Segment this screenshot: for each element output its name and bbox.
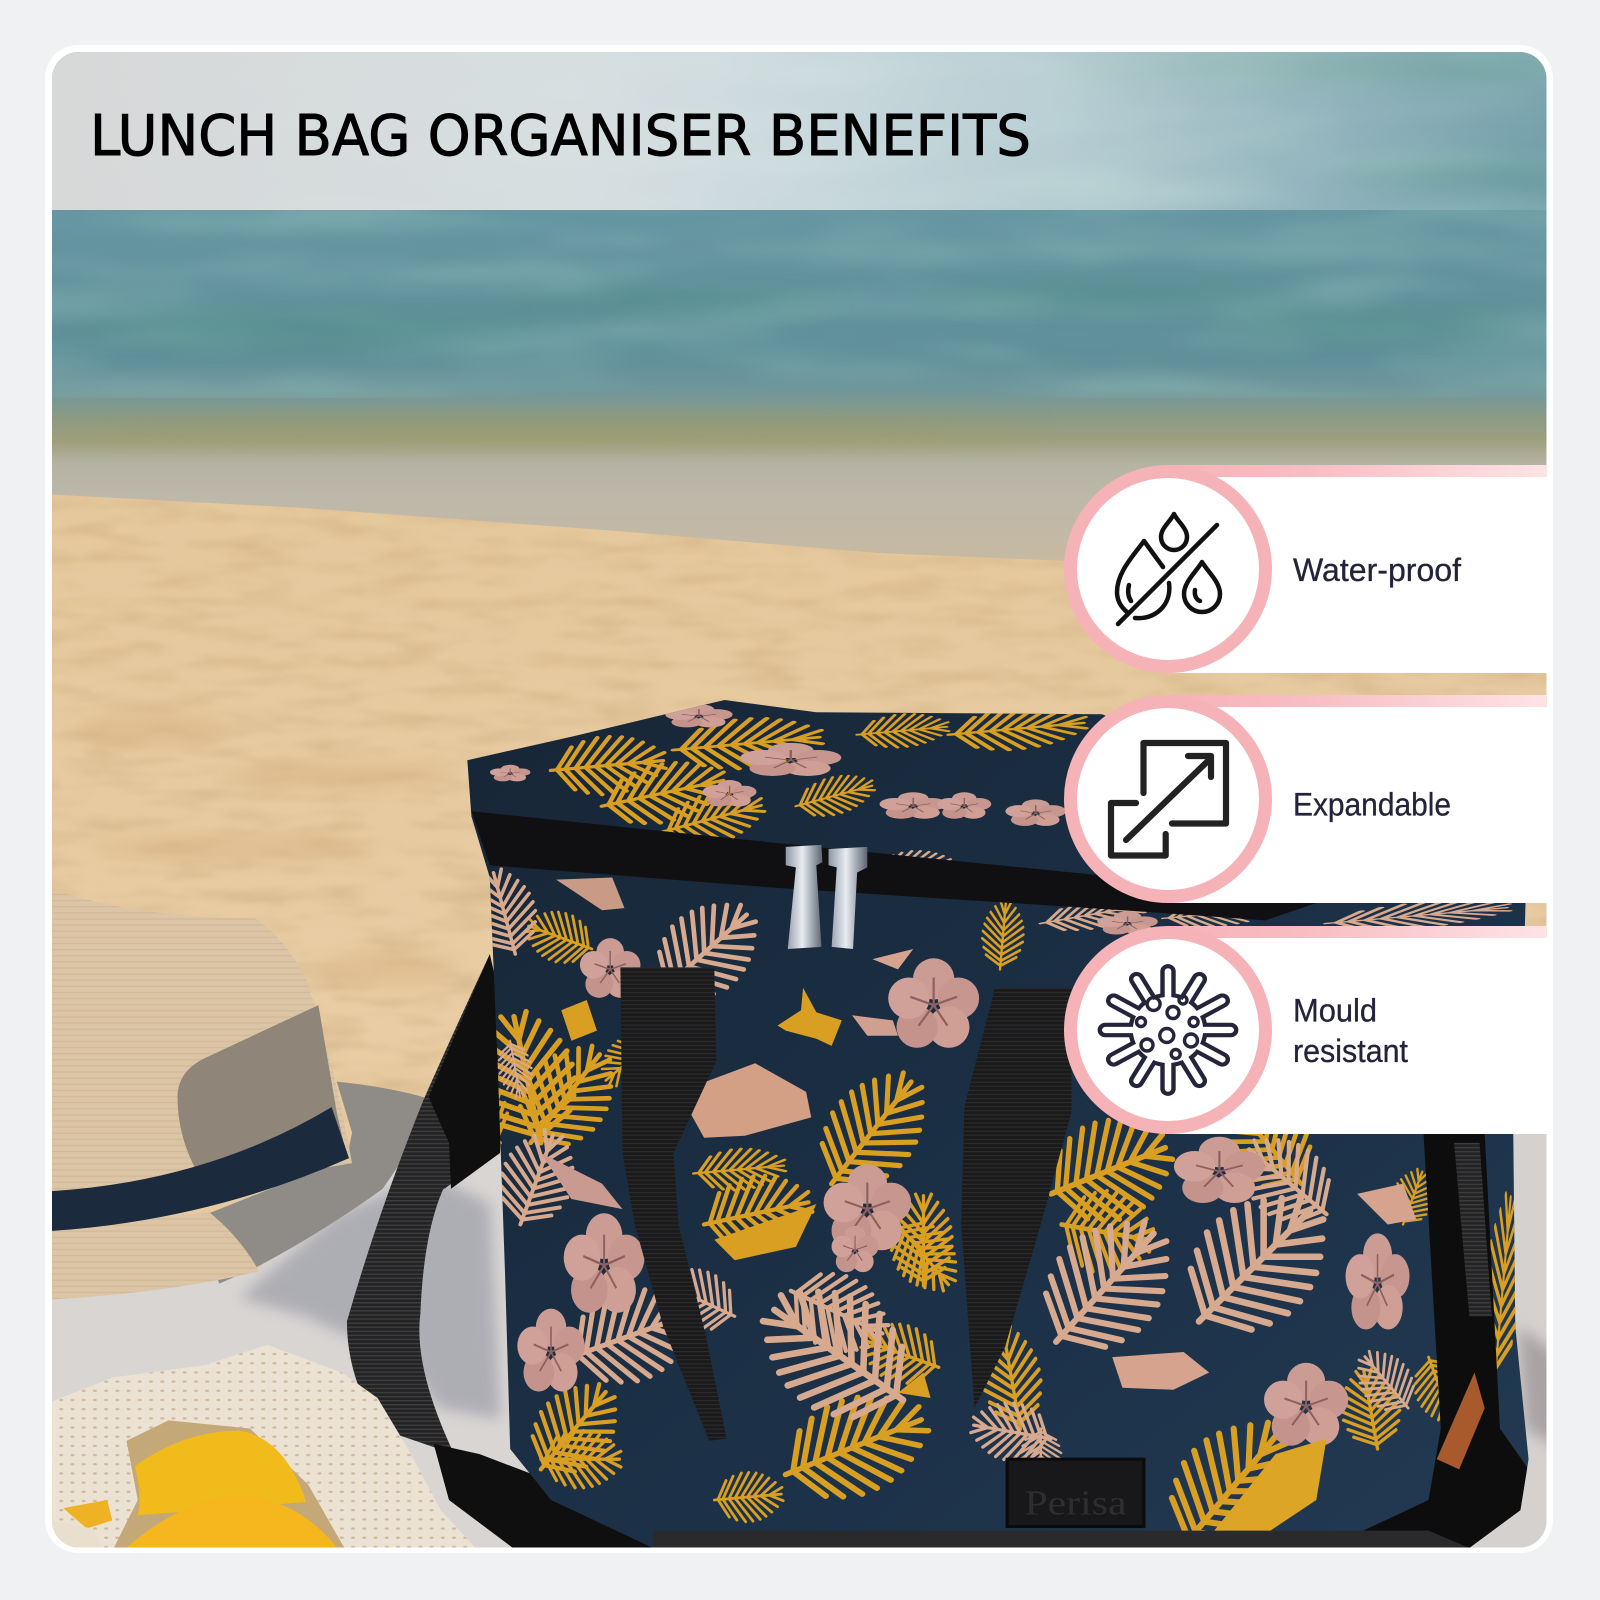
bag side panel — [1363, 1134, 1528, 1548]
bag body — [467, 700, 1529, 1548]
label: water-proof: Water-proof — [1293, 552, 1461, 588]
bag print: peach fronds — [464, 851, 1510, 1486]
lemon small — [63, 1500, 112, 1529]
right handle — [961, 988, 1071, 1408]
bag print: petals and buds — [679, 1063, 811, 1138]
hat brim in shade — [194, 1082, 429, 1284]
label: mould resistant — [1293, 992, 1408, 1069]
hat — [41, 886, 429, 1300]
zipper pulls — [786, 845, 867, 949]
icon: expand arrow — [1111, 743, 1226, 856]
panel: water-proof — [1070, 465, 1547, 673]
bottom strap — [434, 1444, 652, 1548]
hat lower brim — [41, 1212, 259, 1300]
bag print: gold butterfly — [778, 988, 842, 1046]
icon: mould spore — [1105, 971, 1231, 1089]
lemon back — [135, 1431, 306, 1515]
left handle — [620, 967, 727, 1441]
bag print: gold accents — [561, 1000, 597, 1041]
title: LUNCH BAG ORGANISER BENEFITS — [90, 104, 1031, 169]
bag print: gold fronds — [416, 702, 1529, 1580]
bag bottom trim — [653, 1531, 1469, 1548]
label: mould resistant: Mould — [1293, 992, 1377, 1028]
hat band — [41, 1107, 349, 1232]
panel: expandable — [1070, 695, 1547, 903]
label: mould resistant: resistant — [1293, 1033, 1408, 1069]
lunch bag — [416, 700, 1529, 1580]
title banner — [52, 52, 1546, 210]
zipper band — [471, 811, 1316, 920]
hat shadow on crown — [178, 1005, 345, 1184]
panel: mould resistant — [1070, 926, 1547, 1134]
hat crown — [52, 890, 352, 1191]
towel — [41, 1122, 1561, 1561]
mesh bag with lemons — [52, 1345, 475, 1548]
sea and wet shore — [52, 52, 1546, 561]
sand — [41, 490, 1561, 1561]
label: expandable: Expandable — [1293, 786, 1451, 822]
bag print: flowers — [490, 704, 1410, 1446]
brand patch: Perisa — [1024, 1483, 1127, 1522]
icon: crossed water drops — [1117, 514, 1220, 624]
shoulder strap — [347, 954, 505, 1454]
lemon front — [127, 1504, 337, 1548]
icon: mould spore dots — [1136, 996, 1198, 1058]
brand patch — [1007, 1459, 1144, 1527]
